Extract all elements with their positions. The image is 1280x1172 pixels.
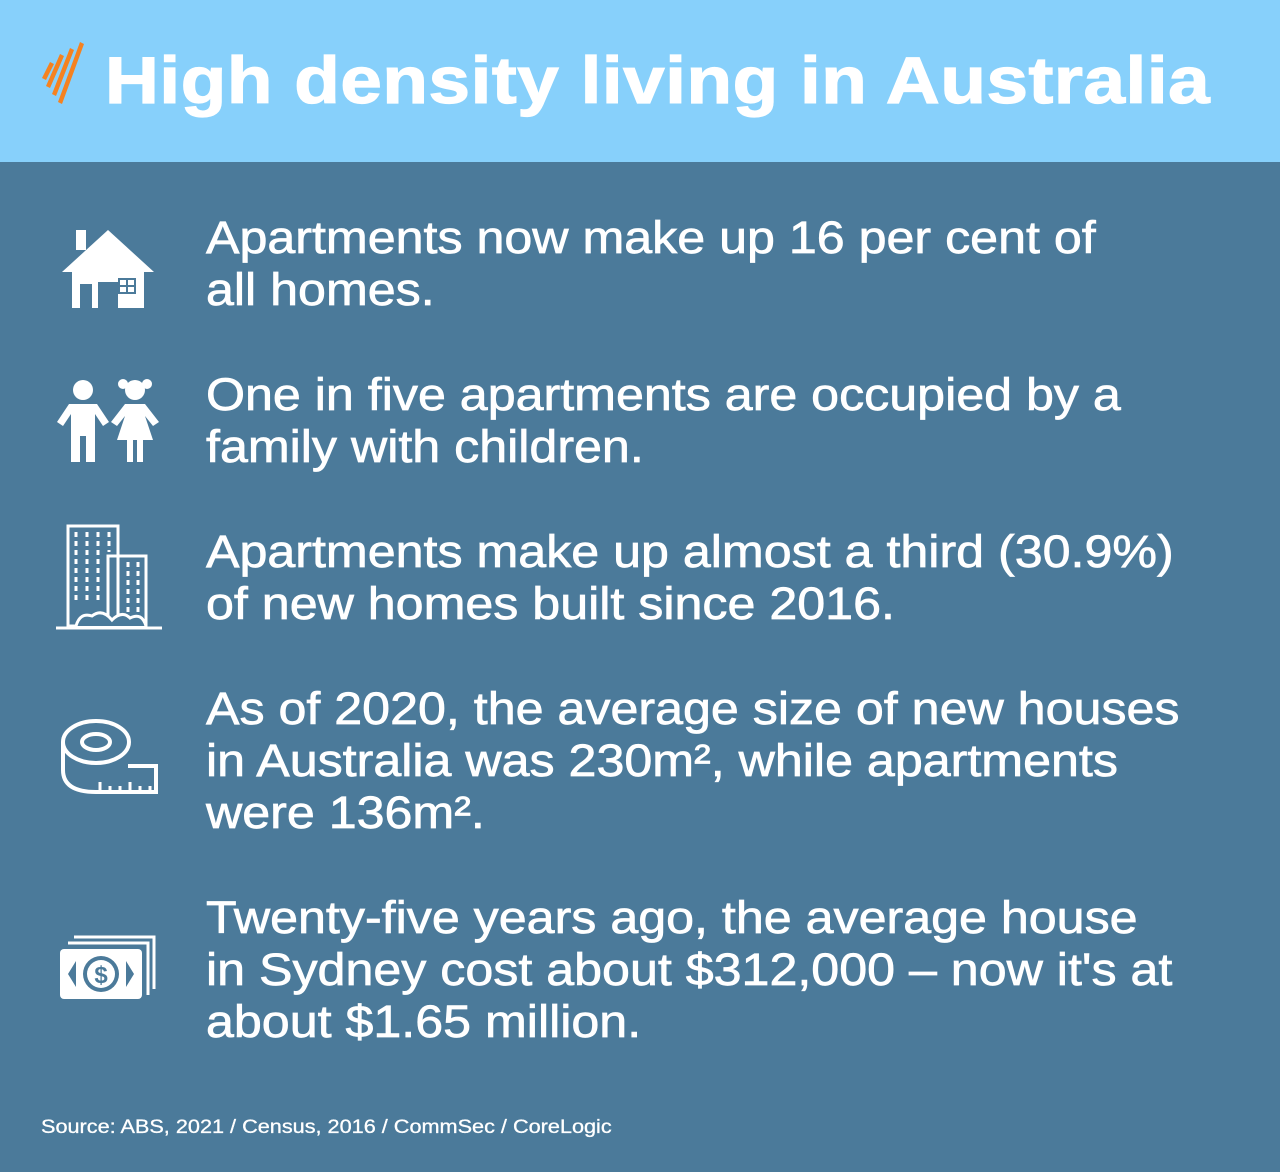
text: average size: in Australia was 230m², while apartments bbox=[206, 735, 1118, 786]
text: Sydney house price: about $1.65 million. bbox=[206, 996, 641, 1047]
icon: house bbox=[62, 230, 154, 308]
icon: money bbox=[60, 936, 156, 999]
icon: SBS logo bbox=[42, 42, 84, 104]
icon: children bbox=[57, 379, 159, 462]
text: apartments 16%: all homes. bbox=[206, 264, 435, 315]
text: Sydney house price: Twenty-five years ago, the average house bbox=[206, 892, 1138, 943]
text: average size bbox=[205, 683, 1179, 838]
text: family: One in five apartments are occupied by a bbox=[206, 369, 1121, 420]
text: Sydney house price bbox=[206, 892, 1172, 1047]
text: average size: As of 2020, the average size of new houses bbox=[206, 683, 1179, 734]
text: family: family with children. bbox=[206, 421, 644, 472]
text: average size: were 136m². bbox=[206, 787, 485, 838]
text: third of new homes: of new homes built since 2016. bbox=[206, 578, 895, 629]
icon: buildings bbox=[56, 524, 162, 630]
text: family bbox=[206, 369, 1122, 472]
text: Sydney house price: in Sydney cost about $312,000 – now it's at bbox=[206, 944, 1172, 995]
text: apartments 16% bbox=[206, 212, 1096, 315]
icon: money: $ bbox=[94, 962, 108, 989]
text: third of new homes bbox=[206, 526, 1174, 629]
text: third of new homes: Apartments make up almost a third (30.9%) bbox=[206, 526, 1174, 577]
source: Source: ABS, 2021 / Census, 2016 / CommSec / CoreLogic bbox=[41, 1117, 612, 1138]
header band bbox=[0, 0, 1280, 162]
text: apartments 16%: Apartments now make up 16 per cent of bbox=[206, 212, 1096, 263]
icon: tape measure bbox=[61, 719, 158, 794]
title: High density living in Australia bbox=[105, 43, 1210, 117]
